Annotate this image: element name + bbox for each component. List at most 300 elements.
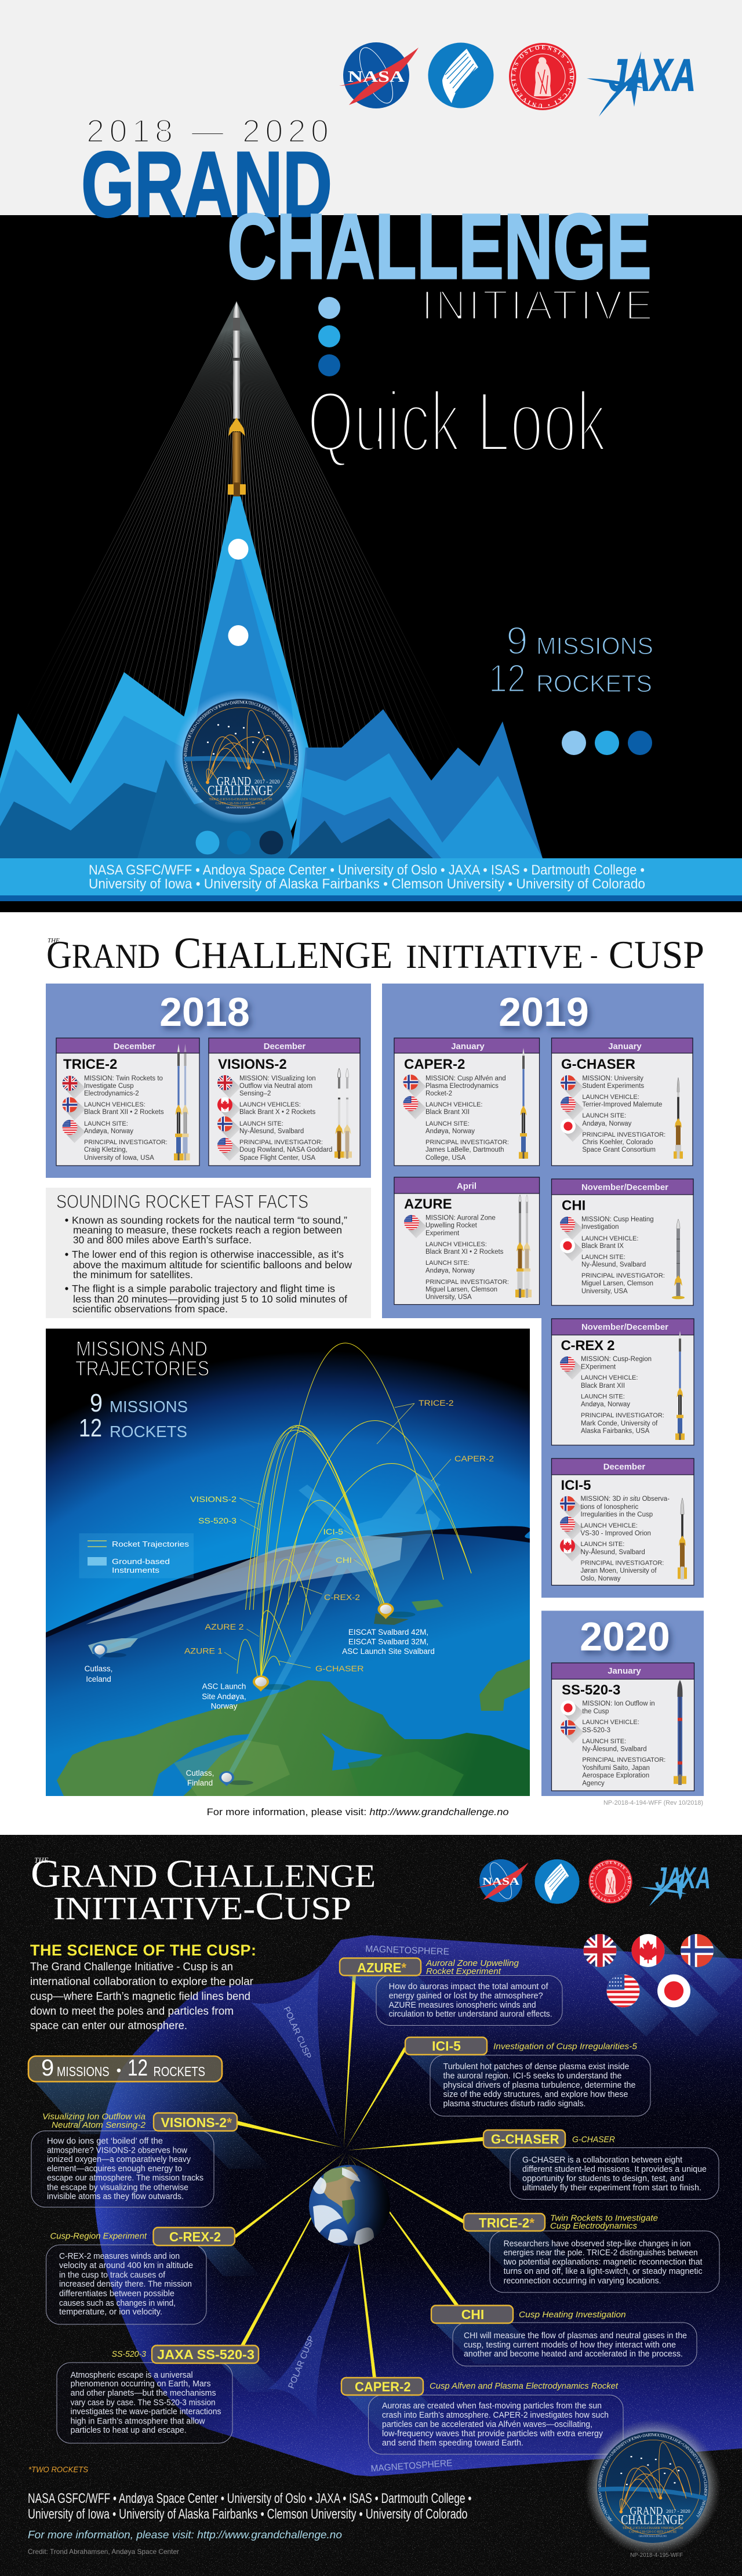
mission: SS-520-3: [57, 2345, 284, 2443]
legend: Ground-based: [112, 1557, 170, 1566]
science intro text: [30, 1961, 254, 2032]
mission labels on map: VISIONS-2: [190, 1495, 237, 1504]
magnetosphere and polar cusp labels: POLAR CUSP: [281, 2005, 313, 2060]
card: CHI: Ny-Ålesund, Svalbard: [581, 1261, 646, 1268]
panel: 2018: [46, 984, 371, 1178]
card: AZURE: PRINCIPAL INVESTIGATOR:: [425, 1279, 509, 1286]
fast facts list: [65, 1214, 352, 1315]
mission badge: CHALLENGE: [208, 783, 273, 799]
counts pill: ROCKETS: [153, 2064, 205, 2079]
fast facts list: Known as sounding rockets for the nautical term “to sound,”: [72, 1214, 347, 1226]
card: CHI: CHI: [562, 1198, 585, 1213]
card: SS-520-3: PRINCIPAL INVESTIGATOR:: [582, 1757, 665, 1764]
logo: NASA: NASA: [482, 1875, 519, 1887]
logo: JAXA: JAXA: [609, 49, 696, 100]
connector lines from hub to mission labels: [235, 1976, 483, 2378]
mission: G-CHASER: G-CHASER: [491, 2132, 559, 2147]
mission: VISIONS-2: VISIONS-2*: [161, 2115, 232, 2130]
partners list: NASA GSFC/WFF • Andøya Space Center • University of Oslo • JAXA • ISAS • Dartmouth College •: [28, 2491, 472, 2506]
mission: CAPER-2: [341, 2378, 623, 2454]
card: ICI-5: Ny-Ålesund, Svalbard: [581, 1548, 645, 1556]
card: CAPER-2: College, USA: [425, 1155, 465, 1162]
map counts: 12: [79, 1414, 102, 1442]
mission labels on map: SS-520-3: [198, 1516, 237, 1525]
mission labels on map: [184, 1399, 494, 1673]
card: CAPER-2: January: [451, 1042, 485, 1051]
side dots: [562, 731, 652, 755]
mission: CAPER-2: Cusp Alfven and Plasma Electrodynamics Rocket: [430, 2381, 619, 2391]
card: CHI: LAUNCH SITE:: [581, 1254, 625, 1261]
card: ICI-5: LAUNCH VEHICLE:: [581, 1522, 638, 1529]
card: VISIONS-2: Space Flight Center, USA: [239, 1155, 315, 1162]
white beam dots: [228, 539, 248, 646]
fast facts list: the minimum for satellites.: [73, 1269, 193, 1280]
top light header background: [0, 0, 742, 215]
mission: ICI-5: [405, 2037, 650, 2116]
card: CAPER-2: Plasma Electrodynamics: [425, 1083, 499, 1090]
card: VISIONS-2: PRINCIPAL INVESTIGATOR:: [239, 1139, 323, 1146]
mission: ICI-5: plasma structures disturb radio signals.: [443, 2099, 585, 2109]
mission: AZURE: Auroral Zone Upwelling: [425, 1958, 519, 1968]
card: SS-520-3: Aerospace Exploration: [582, 1772, 649, 1779]
card: C-REX 2: PRINCIPAL INVESTIGATOR:: [581, 1412, 664, 1419]
mission: VISIONS-2: the escape by visualizing the otherwise: [47, 2183, 188, 2192]
heading 2019: 2019: [499, 989, 589, 1035]
mission and rocket counts: MISSIONS: [536, 632, 653, 659]
card: VISIONS-2: Outflow via Neutral atom: [239, 1083, 312, 1090]
mission badge small: GRAND: [630, 2505, 663, 2517]
section title: The Grand Challenge Initiative - Cusp: CHALLENGE: [174, 929, 392, 978]
mission: TRICE-2: [464, 2213, 719, 2292]
card: ICI-5: [552, 1458, 694, 1585]
mission labels on map: C-REX-2: [324, 1593, 360, 1602]
mission: AZURE: AZURE measures ionospheric winds and: [389, 2001, 536, 2010]
fine ray lines fan: [38, 302, 448, 760]
card: SS-520-3: Ny-Ålesund, Svalbard: [582, 1745, 647, 1753]
card: ICI-5: PRINCIPAL INVESTIGATOR:: [581, 1560, 664, 1567]
card: AZURE: [394, 1177, 539, 1305]
panel: science of the cusp background: [0, 1835, 742, 2576]
logo: NASA: [339, 42, 419, 108]
mission: TRICE-2: Researchers have observed step-like changes in ion: [504, 2240, 691, 2249]
site labels on map: Site Andøya,: [202, 1692, 246, 1701]
card: VISIONS-2: Black Brant X • 2 Rockets: [239, 1109, 315, 1116]
map counts: MISSIONS: [110, 1398, 188, 1416]
mission: CAPER-2: low-frequency waves that provide particles with extra energy: [382, 2429, 603, 2439]
card: CAPER-2: CAPER-2: [404, 1057, 465, 1072]
section title: [31, 1852, 376, 1928]
mission badge: [175, 691, 306, 822]
mission: VISIONS-2: element—acquires enough energy to: [47, 2164, 182, 2174]
mission: TRICE-2: TRICE-2*: [479, 2215, 534, 2230]
logo: NASA: NASA: [348, 68, 405, 85]
card: SS-520-3: the Cusp: [582, 1708, 609, 1715]
card: G-CHASER: Chris Koehler, Colorado: [582, 1139, 653, 1146]
hero rocket: [228, 302, 246, 496]
site labels on map: Finland: [187, 1779, 213, 1787]
mission: AZURE: [340, 1958, 562, 2025]
rocket trajectories: [237, 1343, 471, 1679]
card: ICI-5: tions of Ionospheric: [581, 1504, 638, 1511]
legend: [79, 1533, 194, 1579]
site labels on map: ASC Launch Site Svalbard: [342, 1647, 435, 1656]
site labels on map: ASC Launch: [202, 1682, 246, 1691]
mission: C-REX-2: causes such as changes in wind,: [59, 2299, 176, 2308]
card: CAPER-2: James LaBelle, Dartmouth: [425, 1146, 504, 1153]
label leader lines: [224, 1403, 451, 1668]
mission: VISIONS-2: invisible atoms as they flow outwards.: [47, 2192, 184, 2201]
map counts: ROCKETS: [110, 1423, 187, 1441]
black limb edge: [46, 1526, 530, 1638]
mission: CHI: CHI will measure the flow of plasmas and neutral gases in the: [464, 2331, 687, 2341]
date range 2018-2020: 2018 — 2020: [86, 113, 329, 149]
card: TRICE-2: Electrodynamics-2: [84, 1090, 139, 1097]
credit: Credit: Trond Abrahamsen, Andøya Space Center: [28, 2548, 179, 2556]
mission badge: CAPER-2 SS-520-3 C-REX-2 AZURE: [216, 802, 265, 806]
partners list: [28, 2491, 472, 2522]
fast facts list: 30 and 800 miles above Earth’s surface.: [73, 1234, 252, 1246]
card: SS-520-3: SS-520-3: [562, 1682, 620, 1698]
mission badge: ARC • NASA • JAXA • UNIVERSITY OF OSLO • UNIVERSITY OF IOWA • DARTMOUTH COLLEGE • UNIVERSITY OF ALASKA • CLEMSON UNIVERSITY: [184, 701, 297, 792]
panel: missions and trajectories map: [46, 1329, 530, 1796]
mission badge: TRICE-2 ICI-5 G-CHASER VISIONS-2 CHI: [209, 798, 272, 801]
mission: ICI-5: Investigation of Cusp Irregularities-5: [493, 2041, 638, 2052]
mission: CAPER-2: crash into Earth’s atmosphere. CAPER-2 investigates how such: [382, 2411, 609, 2420]
mission: ICI-5: Turbulent hot patches of dense plasma exist inside: [443, 2062, 630, 2071]
mission: ICI-5: size of the eddy structures, and explore how these: [443, 2090, 628, 2099]
card: G-CHASER: LAUNCH SITE:: [582, 1112, 626, 1119]
card: CHI: PRINCIPAL INVESTIGATOR:: [581, 1272, 665, 1279]
card: ICI-5: VS-30 - Improved Orion: [581, 1530, 651, 1537]
mission: C-REX-2: Cusp-Region Experiment: [50, 2232, 147, 2241]
card: VISIONS-2: MISSION: VISualizing Ion: [239, 1075, 316, 1082]
logo: JAXA: [641, 1862, 711, 1906]
card: TRICE-2: TRICE-2: [63, 1057, 117, 1072]
card: ICI-5: Jøran Moen, University of: [581, 1568, 657, 1574]
card: C-REX 2: Mark Conde, University of: [581, 1420, 658, 1427]
rocket exhaust beam: [145, 496, 316, 858]
science intro text: The Grand Challenge Initiative - Cusp is an: [30, 1961, 233, 1973]
card: VISIONS-2: Sensing–2: [239, 1090, 271, 1097]
section title: The Grand Challenge Initiative - Cusp: GRAND: [46, 933, 160, 977]
mission: SS-520-3: investigates the wave-particle interactions: [71, 2407, 221, 2417]
mission: G-CHASER: different student-led missions. It provides a unique: [522, 2165, 707, 2174]
card: CHI: November/December: [581, 1182, 668, 1192]
magnetosphere and polar cusp labels: MAGNETOSPHERE: [365, 1944, 449, 1957]
card: TRICE-2: Craig Kletzing,: [84, 1146, 128, 1153]
card: AZURE: University, USA: [425, 1294, 472, 1301]
mission: G-CHASER: ultimately fly their experiment from start to finish.: [522, 2183, 701, 2193]
card: TRICE-2: LAUNCH VEHICLES:: [84, 1101, 146, 1108]
card: TRICE-2: [56, 1038, 199, 1166]
card: AZURE: Andøya, Norway: [425, 1268, 475, 1275]
card: VISIONS-2: VISIONS-2: [218, 1057, 287, 1072]
mission: VISIONS-2: atmosphere? VISIONS-2 observes how: [47, 2146, 188, 2156]
mission: VISIONS-2: [31, 2112, 272, 2207]
card: G-CHASER: January: [608, 1042, 642, 1051]
card: SS-520-3: MISSION: Ion Outflow in: [582, 1700, 655, 1707]
mission: TRICE-2: reconnection occurring in varying locations.: [504, 2277, 661, 2286]
mission: G-CHASER: opportunity for students to design, test, and: [522, 2174, 684, 2183]
counts pill: •: [117, 2063, 121, 2078]
more information link: For more information, please visit: http://www.grandchallenge.no: [207, 1806, 509, 1817]
card: AZURE: Black Brant XI • 2 Rockets: [425, 1249, 504, 1256]
magnetosphere and polar cusp labels: MAGNETOSPHERE: [370, 2458, 453, 2474]
more information line: For more information, please visit: http://www.grandchallenge.no: [28, 2529, 342, 2541]
mission: G-CHASER: G-CHASER: [572, 2135, 615, 2145]
mission: C-REX-2: velocity at around 400 km in altitude: [59, 2261, 193, 2270]
card: AZURE: MISSION: Auroral Zone: [425, 1214, 496, 1221]
magnetosphere and polar cusp labels: [281, 1944, 453, 2474]
card: CHI: Investigation: [581, 1224, 619, 1231]
mission: CHI: Cusp Heating Investigation: [519, 2310, 626, 2320]
site labels on map: Iceland: [86, 1675, 111, 1684]
heading 2018: 2018: [159, 989, 250, 1035]
section title: The Grand Challenge Initiative - Cusp: [46, 929, 704, 978]
card: SS-520-3: LAUNCH VEHICLE:: [582, 1719, 639, 1726]
card: SS-520-3: [552, 1663, 694, 1791]
partners band: NASA GSFC/WFF • Andoya Space Center • University of Oslo • JAXA • ISAS • Dartmouth College •: [89, 862, 645, 878]
science intro text: space can enter our atmosphere.: [30, 2020, 187, 2032]
card: G-CHASER: LAUNCH VEHICLE:: [582, 1094, 639, 1101]
mission badge: GRANDCHALLENGE.NO: [226, 806, 256, 809]
mission: AZURE: energy gained or lost by the atmosphere?: [389, 1991, 543, 2001]
mission: C-REX-2: in the cusp to track causes of: [59, 2271, 165, 2280]
legend: Instruments: [112, 1566, 160, 1574]
card: C-REX 2: Black Brant XII: [581, 1383, 625, 1389]
mission: SS-520-3: Atmospheric escape is a universal: [71, 2371, 193, 2380]
card: SS-520-3: LAUNCH SITE:: [582, 1738, 626, 1745]
legend: Rocket Trajectories: [112, 1540, 190, 1548]
section title: THE: [34, 1856, 49, 1864]
card: CHI: Black Brant IX: [581, 1243, 624, 1250]
mission: VISIONS-2: How do ions get ‘boiled’ off the: [47, 2136, 163, 2146]
fast facts heading: SOUNDING ROCKET FAST FACTS: [56, 1191, 308, 1212]
card: TRICE-2: December: [114, 1042, 155, 1051]
heading Quick Look: Quick Look: [307, 374, 607, 470]
fast facts list: meaning to measure, these rockets reach a region between: [73, 1224, 342, 1236]
magnetosphere and polar cusp labels: POLAR CUSP: [286, 2334, 317, 2390]
logo: NASA: [477, 1859, 528, 1902]
fast facts list: The lower end of this region is otherwise inaccessible, as it’s: [72, 1249, 344, 1260]
mission badge small: TRICE-2 ICI-5 G-CHASER VISIONS-2 CHI: [623, 2527, 683, 2530]
fast facts list: scientific observations from space.: [72, 1303, 228, 1315]
document number: NP-2018-4-195-WFF: [630, 2552, 683, 2559]
mission: SS-520-3: high in Earth’s atmosphere that allow: [71, 2417, 205, 2426]
mission labels on map: G-CHASER: [315, 1664, 364, 1673]
site labels on map: Cutlass,: [85, 1664, 112, 1673]
card: CAPER-2: LAUNCH VEHICLE:: [425, 1101, 482, 1108]
card: AZURE: Miguel Larsen, Clemson: [425, 1286, 497, 1293]
partner country flags: [584, 1934, 742, 2037]
site labels on map: Norway: [211, 1701, 238, 1711]
mission: G-CHASER: G-CHASER is a collaboration between eight: [522, 2156, 682, 2165]
card: G-CHASER: G-CHASER: [561, 1057, 635, 1072]
map heading: TRAJECTORIES: [75, 1356, 209, 1380]
heading 2020: 2020: [580, 1614, 670, 1659]
map heading: [76, 1341, 209, 1376]
mission: ICI-5: ICI-5: [432, 2038, 461, 2053]
mission and rocket counts: ROCKETS: [536, 670, 652, 697]
mission and rocket counts: [489, 619, 653, 701]
card: TRICE-2: Black Brant XII • 2 Rockets: [84, 1109, 164, 1116]
mission: C-REX-2: temperature, or ion velocity.: [59, 2307, 162, 2317]
logo: University of Oslo seal: UNIVERSITAS OSLOENSIS • MDCCCXI •: [590, 1862, 631, 1902]
card: CAPER-2: MISSION: Cusp Alfvén and: [425, 1075, 506, 1082]
card: CHI: MISSION: Cusp Heating: [581, 1216, 654, 1223]
mission: VISIONS-2: ionized oxygen—a comparatively heavy: [47, 2155, 191, 2164]
card: SS-520-3: SS-520-3: [582, 1727, 610, 1734]
card: ICI-5: MISSION: 3D in situ Observa-: [581, 1496, 670, 1503]
card: TRICE-2: Investigate Cusp: [84, 1083, 134, 1090]
map heading: MISSIONS AND: [76, 1337, 208, 1360]
mission: G-CHASER: [483, 2130, 719, 2199]
star field: [0, 1835, 742, 2576]
mission: TRICE-2: two potential explanations: magnetic reconnection that: [504, 2258, 703, 2267]
card: C-REX 2: Alaska Fairbanks, USA: [581, 1428, 650, 1435]
title word GRAND: GRAND: [81, 132, 332, 236]
card: VISIONS-2: Doug Rowland, NASA Goddard: [239, 1146, 332, 1153]
mission: SS-520-3: JAXA SS-520-3: [157, 2347, 254, 2362]
mission badge small: CHALLENGE: [621, 2512, 684, 2527]
science heading: THE SCIENCE OF THE CUSP:: [30, 1942, 256, 1959]
card: TRICE-2: MISSION: Twin Rockets to: [84, 1075, 163, 1082]
mission: SS-520-3: and other planets—but the mechanisms: [71, 2389, 216, 2398]
site labels on map: Cutlass,: [186, 1769, 214, 1777]
mission: SS-520-3: vary case by case. The SS-520-3 mission: [71, 2399, 216, 2408]
card: ICI-5: Irregularities in the Cusp: [581, 1511, 653, 1518]
site labels on map: EISCAT Svalbard 42M,: [348, 1628, 428, 1637]
mission badge small: 2017 - 2020: [666, 2508, 690, 2514]
card: CAPER-2: Black Brant XII: [425, 1109, 470, 1116]
mission: CHI: [431, 2306, 697, 2366]
mission labels on map: TRICE-2: [419, 1399, 453, 1407]
land masses: [57, 1599, 530, 1796]
mission: C-REX-2: C-REX-2 measures winds and ion: [59, 2252, 180, 2261]
site labels on map: [85, 1628, 435, 1787]
card: SS-520-3: Yoshifumi Saito, Japan: [582, 1765, 650, 1772]
blue mountains: [0, 672, 543, 858]
card: G-CHASER: Space Grant Consortium: [582, 1146, 656, 1153]
card: CAPER-2: Rocket-2: [425, 1090, 452, 1097]
mission labels on map: CHI: [336, 1556, 352, 1565]
mission and rocket counts: 12: [489, 656, 526, 701]
mission: AZURE: AZURE*: [357, 1960, 406, 1975]
polar cusp funnels: [251, 1969, 343, 2149]
earth globe: [309, 2165, 390, 2246]
card: CAPER-2: LAUNCH SITE:: [425, 1120, 470, 1127]
earth ocean: [46, 1526, 530, 1796]
mission badge small: CAPER-2 SS-520-3 C-REX-2 AZURE: [629, 2531, 677, 2534]
logo: Andoya feather: [428, 43, 494, 108]
card: VISIONS-2: LAUNCH SITE:: [239, 1120, 283, 1127]
card: C-REX 2: [552, 1319, 694, 1445]
card: VISIONS-2: LAUNCH VEHICLES:: [239, 1101, 301, 1108]
fast facts list: above the maximum altitude for scientific balloons and below: [73, 1259, 352, 1271]
logos row: [477, 1859, 711, 1906]
card: AZURE: AZURE: [404, 1196, 452, 1212]
card: ICI-5: Oslo, Norway: [581, 1575, 621, 1582]
card: CHI: Miguel Larsen, Clemson: [581, 1280, 653, 1287]
mission: TRICE-2: Twin Rockets to Investigate: [550, 2213, 658, 2223]
card: TRICE-2: University of Iowa, USA: [84, 1155, 154, 1162]
mission badge: 2017 - 2020: [254, 779, 280, 785]
mission labels on map: AZURE 2: [205, 1623, 243, 1631]
card: AZURE: April: [457, 1181, 477, 1191]
card: C-REX 2: LAUNCH SITE:: [581, 1394, 625, 1401]
word INITIATIVE: INITIATIVE: [421, 282, 653, 329]
mission: VISIONS-2: escape our atmosphere. The mission tracks: [47, 2174, 203, 2183]
science intro text: international collaboration to explore the polar: [30, 1976, 254, 1988]
card: AZURE: Experiment: [425, 1230, 460, 1237]
site labels on map: EISCAT Svalbard 32M,: [348, 1638, 428, 1646]
card: C-REX 2: November/December: [581, 1322, 668, 1332]
sky gradient: [46, 1329, 530, 1632]
mission and rocket counts: 9: [506, 619, 528, 663]
logo: University of Oslo seal: UNIVERSITAS OSLOENSIS • MDCCCXI •: [511, 45, 574, 108]
card: C-REX 2: LAUNCH VEHICLE:: [581, 1374, 638, 1381]
card: TRICE-2: LAUNCH SITE:: [84, 1120, 128, 1127]
card: TRICE-2: PRINCIPAL INVESTIGATOR:: [84, 1139, 168, 1146]
card: C-REX 2: Andøya, Norway: [581, 1401, 630, 1408]
mission: TRICE-2: turns on and off, like a light-switch, or steady magnetic: [504, 2267, 703, 2276]
card: ICI-5: LAUNCH SITE:: [581, 1541, 624, 1548]
mission badge small: GRANDCHALLENGE.NO: [639, 2534, 667, 2537]
mission: CHI: cusp, testing current models of how they interact with one: [464, 2341, 676, 2350]
mission: CAPER-2: Auroras are created when fast-moving particles from the sun: [382, 2401, 602, 2411]
mission: AZURE: Rocket Experiment: [426, 1967, 501, 1976]
section title: INITIATIVE- CUSP: [53, 1884, 351, 1928]
card: CAPER-2: Andøya, Norway: [425, 1128, 475, 1135]
mission labels on map: ICI-5: [323, 1528, 343, 1536]
logo: JAXA: JAXA: [655, 1862, 711, 1895]
mission: CAPER-2: particles can be accelerated via Alfvén waves—oscillating,: [382, 2420, 592, 2429]
card: CAPER-2: PRINCIPAL INVESTIGATOR:: [425, 1139, 509, 1146]
card: SS-520-3: January: [608, 1666, 641, 1676]
section title: The Grand Challenge Initiative - Cusp: INITIATIVE: [406, 938, 583, 975]
fast facts list: The flight is a simple parabolic trajectory and flight time is: [72, 1283, 335, 1294]
card: G-CHASER: [552, 1038, 693, 1166]
section title: The Grand Challenge Initiative - Cusp: -: [590, 942, 598, 968]
mission: CHI: another and become heated and accelerated in the process.: [464, 2350, 683, 2359]
footnote two rockets: *TWO ROCKETS: [28, 2465, 89, 2474]
mission: CAPER-2: and send them speeding toward Earth.: [382, 2439, 523, 2448]
card: C-REX 2: EXperiment: [581, 1364, 616, 1371]
mission: CHI: CHI: [461, 2307, 484, 2322]
mission labels on map: CAPER-2: [454, 1454, 494, 1463]
mission: SS-520-3: SS-520-3: [112, 2349, 147, 2359]
mission: SS-520-3: phenomenon occurring on Earth, Mars: [71, 2379, 211, 2389]
mission labels on map: AZURE 1: [184, 1647, 223, 1656]
panel: sounding rocket fast facts: [46, 1188, 371, 1318]
three stacked dots: [318, 297, 340, 376]
section title: GRAND CHALLENGE: [31, 1852, 376, 1896]
card: G-CHASER: Andøya, Norway: [582, 1120, 632, 1127]
logos: NASA, Andoya, University of Oslo, JAXA: [340, 42, 696, 117]
panel: 2019: [382, 984, 704, 1598]
card: VISIONS-2: Ny-Ålesund, Svalbard: [239, 1127, 304, 1135]
science intro text: down to meet the poles and particles from: [30, 2005, 234, 2018]
site pins: [92, 1603, 415, 1786]
map counts: 9: [90, 1389, 103, 1417]
mission: TRICE-2: energies near the pole. TRICE-2 distinguishes between: [504, 2248, 698, 2258]
card: CHI: LAUNCH VEHICLE:: [581, 1235, 638, 1242]
panel: 2020: [541, 1611, 704, 1796]
card: G-CHASER: PRINCIPAL INVESTIGATOR:: [582, 1131, 665, 1138]
card: CHI: [552, 1179, 693, 1305]
partners list: University of Iowa • University of Alaska Fairbanks • Clemson University • University of Colorado: [28, 2506, 467, 2522]
mission: TRICE-2: Cusp Electrodynamics: [550, 2221, 637, 2231]
